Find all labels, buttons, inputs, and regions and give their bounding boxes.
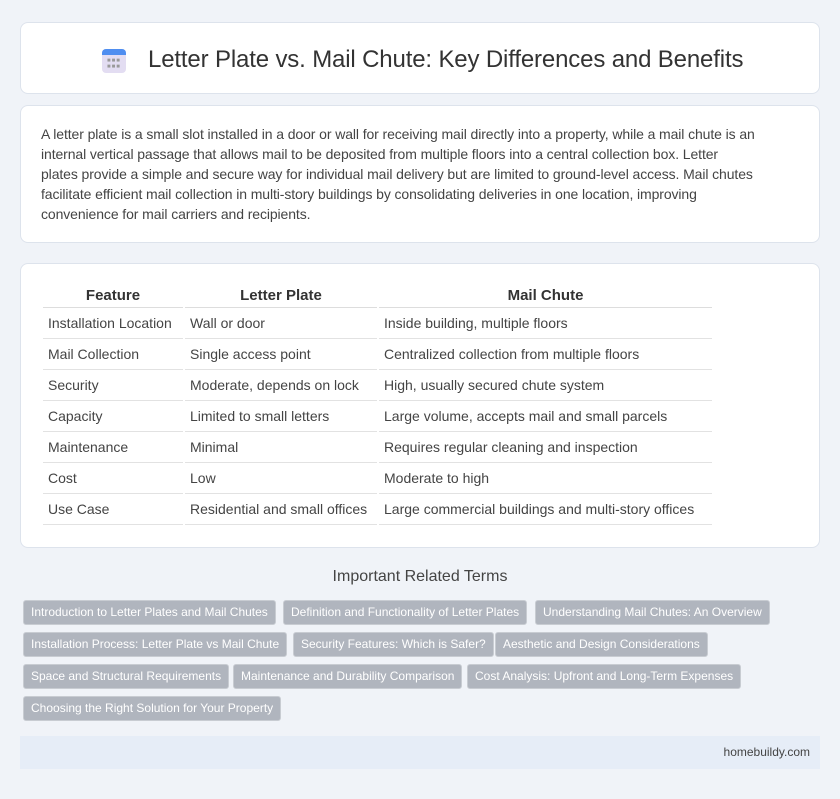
intro text: internal vertical passage that allows mail to be deposited from multiple floors into a central collection box. Letter — [41, 146, 718, 162]
footer — [20, 736, 820, 769]
comparison table: Maintenance — [48, 439, 128, 455]
title: Letter Plate vs. Mail Chute: Key Differences and Benefits — [148, 46, 743, 73]
comparison table: Feature — [86, 287, 140, 304]
related terms tags: Space and Structural Requirements — [31, 669, 221, 683]
comparison table: Security — [48, 377, 99, 393]
comparison table: Installation Location — [48, 315, 172, 331]
comparison table: Mail Collection — [48, 346, 139, 362]
related terms tags: Understanding Mail Chutes: An Overview — [543, 605, 762, 619]
comparison table: Limited to small letters — [190, 408, 329, 424]
related terms tags: Introduction to Letter Plates and Mail Chutes — [31, 605, 268, 619]
comparison table: Letter Plate — [240, 287, 322, 304]
comparison table: Moderate, depends on lock — [190, 377, 359, 393]
icon: calendar — [102, 49, 126, 73]
intro text: plates provide a simple and secure way for individual mail delivery but are limited to ground-level access. Mail chutes — [41, 166, 753, 182]
comparison table: Residential and small offices — [190, 501, 367, 517]
related terms tags: Cost Analysis: Upfront and Long-Term Expenses — [475, 669, 733, 683]
comparison table — [20, 263, 820, 548]
related terms tags: Maintenance and Durability Comparison — [241, 669, 454, 683]
comparison table: Inside building, multiple floors — [384, 315, 568, 331]
comparison table: Single access point — [190, 346, 311, 362]
related terms tags: Aesthetic and Design Considerations — [503, 637, 700, 651]
icon: calendar: ■■■ — [107, 64, 121, 70]
comparison table: Wall or door — [190, 315, 265, 331]
related terms tags: Installation Process: Letter Plate vs Mail Chute — [31, 637, 279, 651]
comparison table: Requires regular cleaning and inspection — [384, 439, 638, 455]
icon: calendar: ■■■ — [107, 58, 121, 64]
comparison table: Low — [190, 470, 216, 486]
comparison table: Moderate to high — [384, 470, 489, 486]
comparison table: Capacity — [48, 408, 102, 424]
intro text: A letter plate is a small slot installed in a door or wall for receiving mail directly into a property, while a mail chute is an — [41, 126, 755, 142]
header card — [20, 22, 820, 94]
comparison table: Large volume, accepts mail and small parcels — [384, 408, 667, 424]
comparison table: Use Case — [48, 501, 109, 517]
intro text: facilitate efficient mail collection in multi-story buildings by consolidating deliveries in one location, improving — [41, 186, 697, 202]
related terms heading: Important Related Terms — [333, 568, 507, 585]
comparison table: Centralized collection from multiple floors — [384, 346, 639, 362]
intro text — [20, 105, 820, 243]
comparison table: Mail Chute — [508, 287, 583, 304]
comparison table: High, usually secured chute system — [384, 377, 604, 393]
related terms tags: Choosing the Right Solution for Your Property — [31, 701, 273, 715]
comparison table: Large commercial buildings and multi-story offices — [384, 501, 694, 517]
footer: homebuildy.com — [724, 745, 810, 759]
intro text: convenience for mail carriers and recipients. — [41, 206, 310, 222]
related terms tags: Security Features: Which is Safer? — [301, 637, 486, 651]
related terms tags: Definition and Functionality of Letter Plates — [291, 605, 519, 619]
comparison table: Cost — [48, 470, 77, 486]
comparison table: Minimal — [190, 439, 238, 455]
